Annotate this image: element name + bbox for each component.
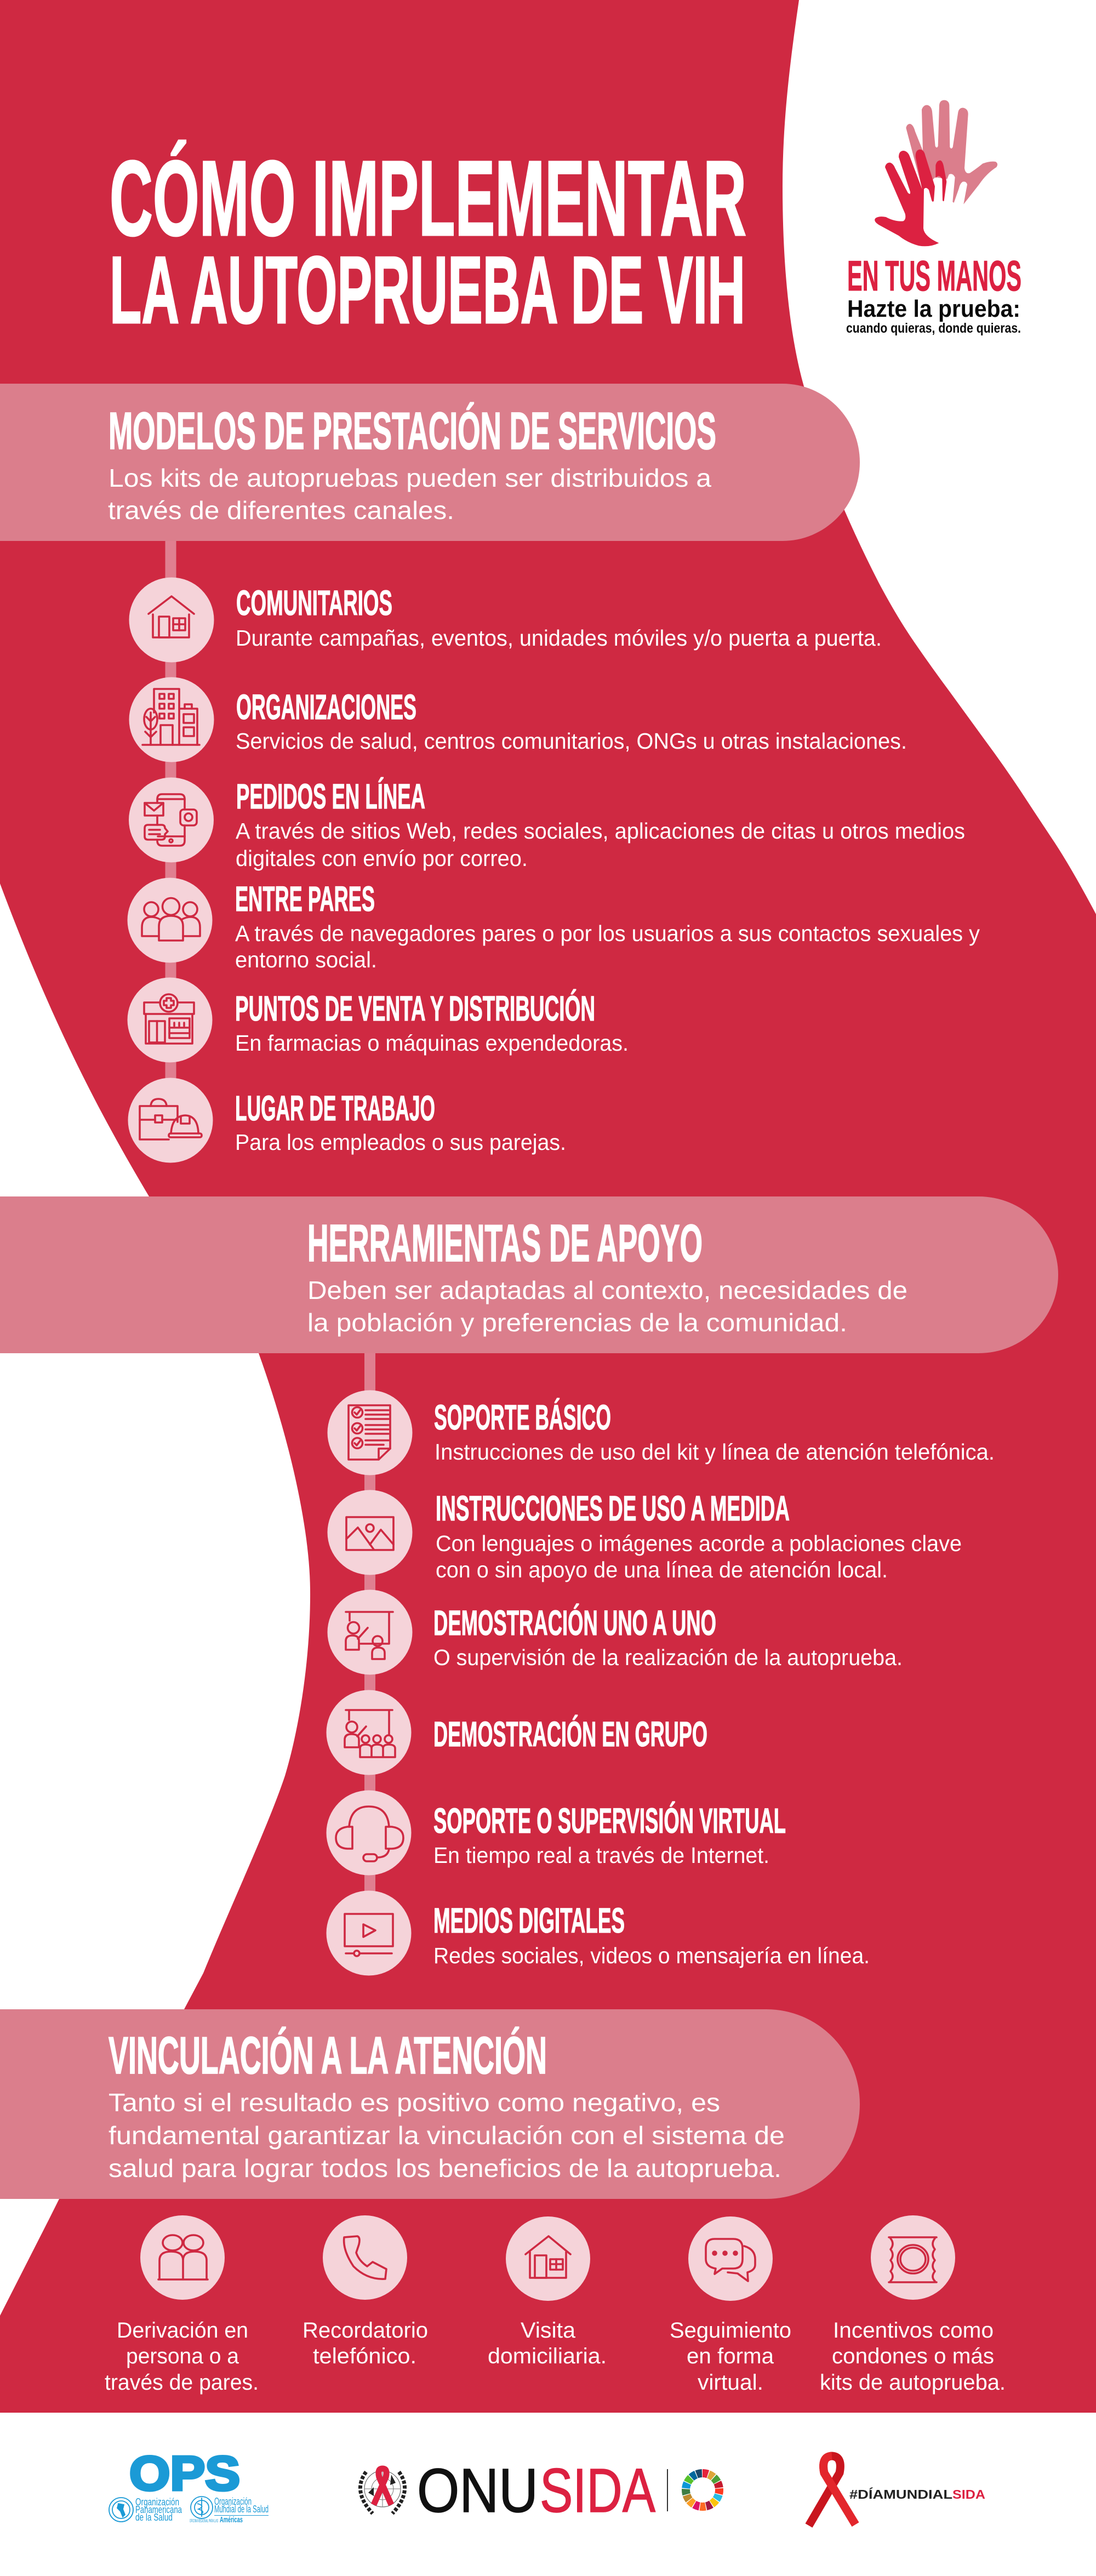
icon: two people	[158, 2235, 208, 2279]
item: organizaciones	[129, 677, 907, 762]
caption	[105, 2318, 259, 2395]
heading: ENTRE PARES	[235, 879, 375, 919]
icon: hands	[875, 100, 997, 246]
heading: VINCULACIÓN A LA ATENCIÓN	[109, 2026, 547, 2085]
caption: Incentivos como	[833, 2318, 994, 2343]
caption: Seguimiento	[670, 2318, 791, 2343]
connector stem: modelos	[165, 537, 176, 1085]
description: A través de navegadores pares o por los usuarios a sus contactos sexuales y	[235, 921, 980, 946]
text block	[109, 2088, 785, 2182]
logo: OPS	[109, 2446, 269, 2524]
caption: condones o más	[832, 2344, 994, 2368]
caption: virtual.	[698, 2370, 763, 2395]
text block: Deben ser adaptadas al contexto, necesidades de	[307, 1276, 907, 1304]
item: medios digitales	[327, 1891, 870, 1975]
item: soporte o supervisión virtual	[327, 1790, 786, 1876]
description: O supervisión de la realización de la autoprueba.	[433, 1645, 903, 1670]
logo: día mundial del sida: SIDA	[952, 2487, 985, 2501]
logo: OPS: Organización	[135, 2497, 179, 2507]
text block: fundamental garantizar la vinculación con el sistema de	[109, 2121, 785, 2150]
description: con o sin apoyo de una línea de atención local.	[436, 1557, 888, 1582]
description: entorno social.	[235, 947, 377, 972]
logo: ONUSIDA	[360, 2456, 719, 2525]
description: digitales con envío por correo.	[236, 846, 528, 871]
icon: buildings	[142, 689, 199, 745]
icon: SDG wheel	[686, 2473, 719, 2507]
description: Instrucciones de uso del kit y línea de atención telefónica.	[435, 1439, 995, 1464]
icon: pharmacy	[144, 994, 194, 1044]
description: Servicios de salud, centros comunitarios, ONGs u otras instalaciones.	[236, 728, 907, 754]
logo: OPS: OFICINA REGIONAL PARA LAS	[190, 2518, 218, 2523]
heading: INSTRUCCIONES DE USO A MEDIDA	[436, 1489, 790, 1528]
campaign logo: en tus manos	[846, 100, 1021, 336]
description: Redes sociales, videos o mensajería en línea.	[433, 1943, 870, 1968]
icon: chat bubbles	[706, 2239, 755, 2281]
icon: three people	[142, 898, 200, 941]
description	[235, 921, 980, 972]
caption: Recordatorio	[302, 2318, 428, 2343]
caption: telefónico.	[313, 2344, 416, 2368]
logo: OPS: de la Salud	[135, 2512, 173, 2523]
logo: ONUSIDA: SIDA	[540, 2456, 655, 2525]
caption	[670, 2318, 791, 2395]
description: Para los empleados o sus parejas.	[235, 1130, 566, 1155]
description: Durante campañas, eventos, unidades móviles y/o puerta a puerta.	[236, 625, 882, 651]
text block	[307, 1276, 907, 1337]
heading: DEMOSTRACIÓN EN GRUPO	[433, 1714, 707, 1754]
heading: HERRAMIENTAS DE APOYO	[307, 1214, 703, 1273]
text block: Los kits de autopruebas pueden ser distribuidos a	[109, 464, 711, 492]
description: En farmacias o máquinas expendedoras.	[235, 1030, 629, 1056]
icon: briefcase and helmet	[140, 1099, 202, 1139]
logo: OPS: OPS	[129, 2446, 240, 2500]
campaign logo: en tus manos: Hazte la prueba:	[847, 295, 1020, 322]
caption	[820, 2318, 1006, 2395]
text block: Tanto si el resultado es positivo como negativo, es	[109, 2088, 720, 2117]
text block: través de diferentes canales.	[108, 496, 454, 525]
item: demostración en grupo	[327, 1690, 707, 1775]
description	[236, 818, 965, 871]
caption: través de pares.	[105, 2370, 259, 2395]
icon: picture	[346, 1517, 393, 1550]
item: derivación	[105, 2215, 259, 2395]
item: recordatorio telefónico	[302, 2215, 428, 2368]
caption: Derivación en	[117, 2318, 248, 2343]
caption	[488, 2318, 607, 2368]
caption: domiciliaria.	[488, 2344, 607, 2368]
heading: COMUNITARIOS	[236, 583, 392, 623]
icon: phone handset	[344, 2236, 386, 2279]
logo: ONUSIDA: ONU	[417, 2456, 538, 2525]
description: A través de sitios Web, redes sociales, aplicaciones de citas u otros medios	[236, 818, 965, 844]
campaign logo: en tus manos: cuando quieras, donde quieras.	[846, 321, 1021, 336]
icon: group demonstration	[345, 1710, 395, 1757]
caption	[302, 2318, 428, 2368]
icon: condom packet	[889, 2237, 937, 2282]
text block	[108, 464, 711, 525]
heading: LUGAR DE TRABAJO	[235, 1088, 435, 1128]
icon: video player	[345, 1914, 393, 1956]
item: entre pares	[127, 878, 980, 972]
item: puntos de venta y distribución	[127, 978, 629, 1062]
panel: modelos de prestación de servicios	[0, 384, 860, 541]
item: incentivos	[820, 2215, 1006, 2395]
logo: OPS: Organización	[214, 2496, 252, 2507]
item: visita domiciliaria	[488, 2216, 607, 2368]
icon: PAHO seal	[109, 2498, 133, 2522]
item: seguimiento virtual	[670, 2216, 791, 2395]
icon: house	[149, 596, 194, 637]
caption: en forma	[687, 2344, 774, 2368]
caption: Visita	[521, 2318, 576, 2343]
icon: checklist	[349, 1405, 390, 1460]
logo: día mundial del sida	[809, 2456, 985, 2526]
heading: ORGANIZACIONES	[236, 687, 416, 727]
icon: headset	[336, 1806, 403, 1861]
caption: kits de autoprueba.	[820, 2370, 1006, 2395]
item: demostración uno a uno	[328, 1589, 903, 1675]
item: lugar de trabajo	[128, 1078, 566, 1163]
heading: SOPORTE BÁSICO	[434, 1398, 611, 1437]
logo: OPS: Mundial de la Salud	[214, 2504, 269, 2515]
icon: red ribbon	[809, 2456, 855, 2526]
icon: WHO seal	[191, 2497, 213, 2518]
item: pedidos en línea	[129, 777, 965, 871]
panel: vinculación a la atención	[0, 2009, 860, 2199]
item: comunitarios	[129, 578, 882, 662]
icon: phone and apps	[145, 794, 197, 846]
caption: persona o a	[126, 2344, 239, 2368]
heading: MEDIOS DIGITALES	[433, 1901, 625, 1940]
logo: día mundial del sida: #DÍAMUNDIAL	[849, 2487, 952, 2501]
icon: one to one demonstration	[346, 1612, 393, 1659]
logo: OPS: Panamericana	[135, 2504, 182, 2515]
item: instrucciones de uso a medida	[328, 1489, 962, 1582]
description: En tiempo real a través de Internet.	[433, 1843, 769, 1868]
heading: SOPORTE O SUPERVISIÓN VIRTUAL	[433, 1801, 786, 1840]
connector stem: herramientas	[364, 1348, 375, 1896]
description	[436, 1531, 962, 1582]
title	[110, 139, 746, 343]
heading: PUNTOS DE VENTA Y DISTRIBUCIÓN	[235, 989, 595, 1028]
heading: PEDIDOS EN LÍNEA	[236, 777, 425, 816]
panel: herramientas de apoyo	[0, 1196, 1058, 1353]
text block: la población y preferencias de la comunidad.	[307, 1308, 847, 1337]
text block: salud para lograr todos los beneficios de la autoprueba.	[109, 2154, 781, 2182]
description: Con lenguajes o imágenes acorde a poblaciones clave	[436, 1531, 962, 1556]
icon: UN seal with ribbon	[360, 2469, 405, 2514]
item: soporte básico	[328, 1390, 995, 1475]
icon: house	[526, 2236, 570, 2278]
heading: DEMOSTRACIÓN UNO A UNO	[433, 1603, 716, 1643]
logo: OPS: Américas	[220, 2515, 243, 2524]
